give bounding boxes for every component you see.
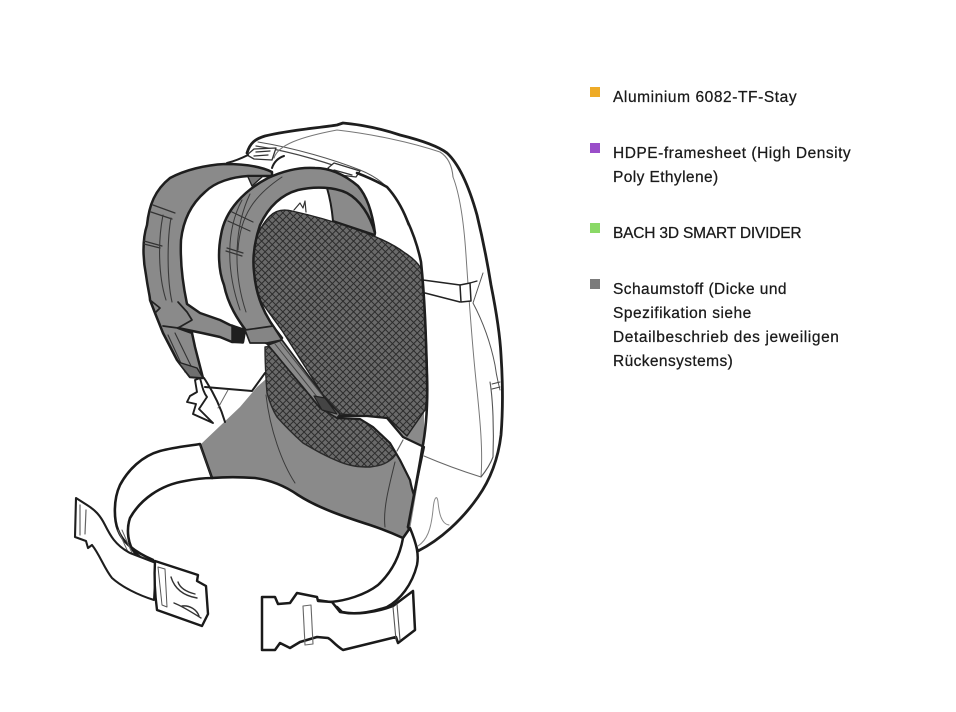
side panel seam lines bbox=[256, 130, 500, 546]
legend item: aluminium bbox=[590, 87, 797, 106]
bag body bbox=[247, 123, 502, 551]
near shoulder strap bbox=[219, 168, 375, 344]
top edge of near side body bbox=[272, 156, 284, 168]
label: foam: Rückensystems) bbox=[613, 353, 733, 370]
swatch: orange bbox=[590, 87, 600, 97]
strap tail zigzag bbox=[187, 373, 265, 423]
legend item: divider bbox=[590, 223, 801, 242]
hip belt left bbox=[115, 444, 212, 570]
buckle female bbox=[155, 561, 208, 626]
white lumbar strap bbox=[337, 416, 424, 495]
handle link to far strap bbox=[227, 155, 248, 163]
small straps behind near shoulder bbox=[294, 201, 306, 212]
back panel right edge bbox=[357, 173, 427, 527]
hip belt webbing left bbox=[75, 498, 156, 600]
label: HDPE: Poly Ethylene) bbox=[613, 169, 719, 186]
label: foam: Spezifikation siehe bbox=[613, 305, 752, 322]
lower mesh panel bbox=[265, 346, 397, 467]
buckle male and webbing right bbox=[262, 591, 415, 650]
swatch: purple bbox=[590, 143, 600, 153]
label: HDPE: HDPE-framesheet (High Density bbox=[613, 145, 851, 162]
label: foam: Schaumstoff (Dicke und bbox=[613, 281, 787, 298]
label: aluminium: Aluminium 6082-TF-Stay bbox=[613, 89, 797, 106]
legend item: HDPE bbox=[590, 143, 851, 186]
near shoulder strap rear section bbox=[327, 188, 375, 235]
swatch: green bbox=[590, 223, 600, 233]
far shoulder strap bbox=[144, 164, 272, 378]
side compression strap with buckle bbox=[423, 280, 477, 302]
hip belt right bbox=[317, 528, 418, 613]
foam lower edge bbox=[212, 477, 403, 538]
legend item: foam bbox=[590, 279, 840, 370]
label: divider: BACH 3D SMART DIVIDER bbox=[613, 225, 801, 242]
hip foam panel bbox=[200, 379, 424, 538]
label: foam: Detailbeschrieb des jeweiligen bbox=[613, 329, 840, 346]
top handle loops bbox=[247, 148, 360, 177]
lower shoulder strap to lumbar bbox=[268, 340, 340, 418]
foam panel seams bbox=[266, 395, 395, 527]
swatch: gray bbox=[590, 279, 600, 289]
mesh back panel bbox=[250, 210, 427, 436]
legend bbox=[590, 87, 851, 370]
label: foam bbox=[613, 281, 840, 370]
label: HDPE bbox=[613, 145, 851, 186]
